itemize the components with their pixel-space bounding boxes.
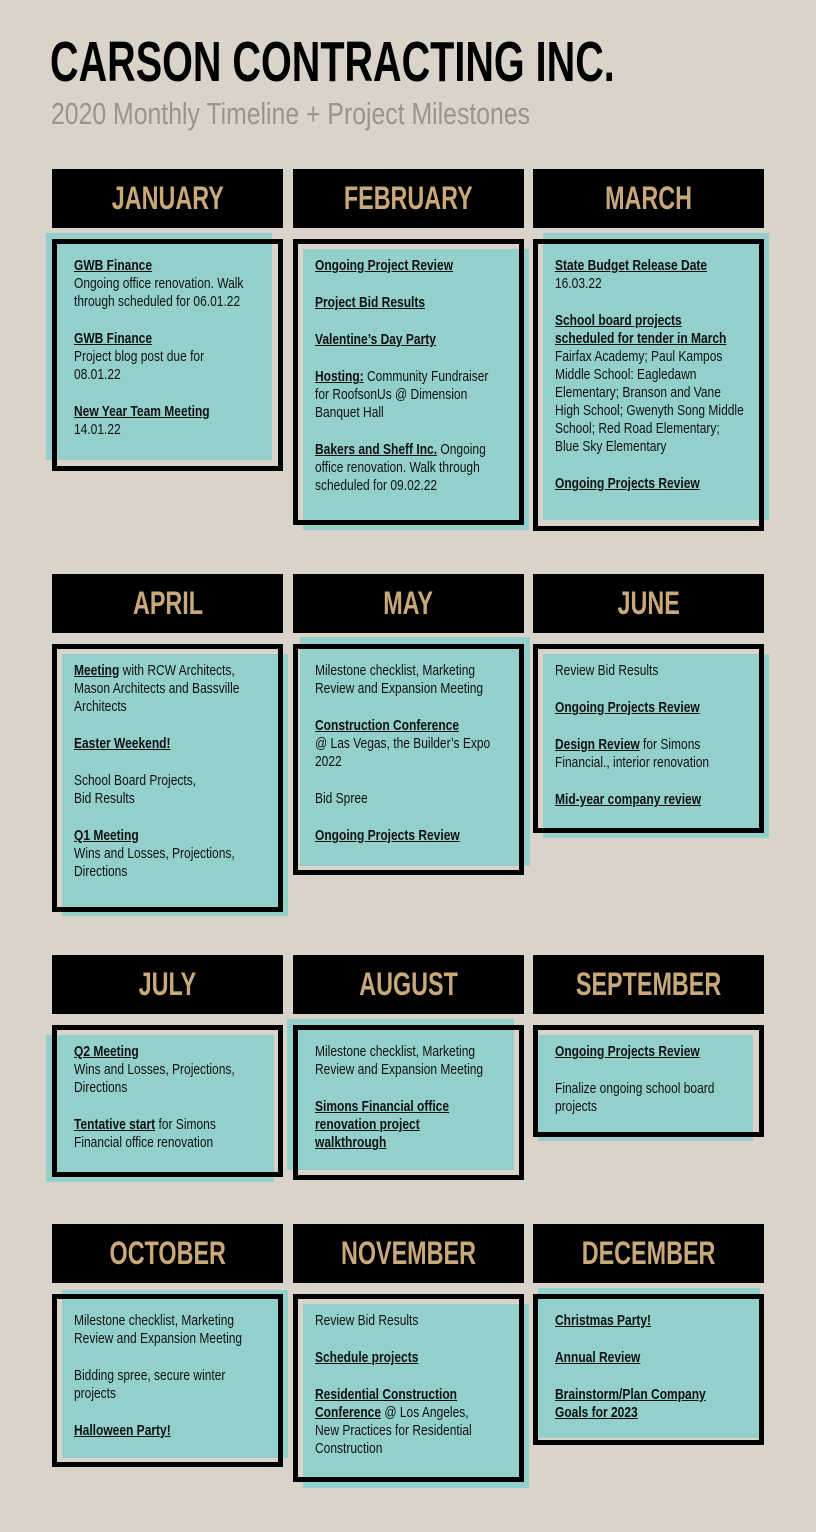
text: may: Review and Expansion Meeting: [315, 680, 483, 697]
heading: march: MARCH: [605, 180, 692, 216]
heading: december: DECEMBER: [582, 1235, 715, 1271]
text: february: scheduled for 09.02.22: [315, 477, 437, 494]
text: april: Bid Results: [74, 790, 135, 807]
text: may: Construction Conference: [315, 717, 459, 734]
text: october: Milestone checklist, Marketing: [74, 1312, 234, 1329]
panel: december: [533, 1224, 764, 1445]
text: february: Ongoing Project Review: [315, 257, 453, 274]
heading: january: [52, 169, 283, 228]
heading: may: [293, 574, 524, 633]
text: february: Bakers and Sheff Inc. Ongoing: [315, 441, 486, 458]
text: september: Ongoing Projects Review: [555, 1043, 700, 1060]
text: january: through scheduled for 06.01.22: [74, 293, 240, 310]
text: june: Financial., interior renovation: [555, 754, 709, 771]
text: july: Q2 Meeting: [74, 1043, 139, 1060]
text: december: Goals for 2023: [555, 1404, 638, 1421]
text: december: Annual Review: [555, 1349, 640, 1366]
text: september: [555, 1043, 714, 1115]
heading: august: [293, 955, 524, 1014]
text: april: Mason Architects and Bassville: [74, 680, 239, 697]
heading: january: JANUARY: [111, 180, 224, 216]
panel: march: [533, 169, 769, 531]
text: december: Christmas Party!: [555, 1312, 651, 1329]
text: july: Tentative start for Simons: [74, 1116, 216, 1133]
text: may: @ Las Vegas, the Builder’s Expo: [315, 735, 490, 752]
text: october: Halloween Party!: [74, 1422, 171, 1439]
text: april: Wins and Losses, Projections,: [74, 845, 235, 862]
text: march: State Budget Release Date: [555, 257, 707, 274]
text: march: School; Red Road Elementary;: [555, 420, 720, 437]
text: march: Elementary; Branson and Vane: [555, 384, 721, 401]
text: may: 2022: [315, 753, 342, 770]
text: february: office renovation. Walk through: [315, 459, 480, 476]
heading: august: AUGUST: [359, 966, 458, 1002]
text: april: Q1 Meeting: [74, 827, 139, 844]
panel: august: [287, 955, 524, 1180]
text: august: [315, 1043, 483, 1151]
title: CARSON CONTRACTING INC.: [50, 30, 615, 94]
text: february: Valentine’s Day Party: [315, 331, 436, 348]
text: july: [74, 1043, 235, 1151]
panel: february: [293, 169, 529, 530]
text: march: [555, 257, 744, 492]
text: may: Bid Spree: [315, 790, 368, 807]
heading: july: JULY: [139, 966, 196, 1002]
text: january: Ongoing office renovation. Walk: [74, 275, 243, 292]
panel: july: [46, 955, 283, 1182]
text: august: renovation project: [315, 1116, 420, 1133]
text: december: Brainstorm/Plan Company: [555, 1386, 706, 1403]
text: november: [315, 1312, 472, 1457]
heading: february: FEBRUARY: [344, 180, 473, 216]
text: november: New Practices for Residential: [315, 1422, 472, 1439]
panel: may: [293, 574, 530, 875]
text: march: Fairfax Academy; Paul Kampos: [555, 348, 722, 365]
heading: november: NOVEMBER: [341, 1235, 476, 1271]
heading: april: APRIL: [132, 585, 203, 621]
text: august: Milestone checklist, Marketing: [315, 1043, 475, 1060]
text: january: Project blog post due for: [74, 348, 204, 365]
heading: october: [52, 1224, 283, 1283]
heading: may: MAY: [384, 585, 433, 621]
panel: april: [52, 574, 288, 916]
text: july: Financial office renovation: [74, 1134, 213, 1151]
heading: april: [52, 574, 283, 633]
text: june: Design Review for Simons: [555, 736, 700, 753]
text: june: Mid-year company review: [555, 791, 701, 808]
text: june: [555, 662, 709, 808]
heading: october: OCTOBER: [109, 1235, 226, 1271]
text: january: GWB Finance: [74, 257, 152, 274]
text: february: [315, 257, 488, 494]
text: march: scheduled for tender in March: [555, 330, 726, 347]
text: july: Wins and Losses, Projections,: [74, 1061, 235, 1078]
text: march: Middle School: Eagledawn: [555, 366, 696, 383]
text: october: projects: [74, 1385, 116, 1402]
heading: february: [293, 169, 524, 228]
text: july: Directions: [74, 1079, 127, 1096]
text: november: Schedule projects: [315, 1349, 418, 1366]
text: september: Finalize ongoing school board: [555, 1080, 714, 1097]
text: august: Simons Financial office: [315, 1098, 449, 1115]
text: january: [74, 257, 244, 438]
text: march: Blue Sky Elementary: [555, 438, 666, 455]
heading: june: JUNE: [617, 585, 680, 621]
heading: september: [533, 955, 764, 1014]
text: april: Directions: [74, 863, 127, 880]
text: september: projects: [555, 1098, 597, 1115]
heading: march: [533, 169, 764, 228]
text: february: Banquet Hall: [315, 404, 384, 421]
text: november: Residential Construction: [315, 1386, 457, 1403]
text: february: Project Bid Results: [315, 294, 425, 311]
text: january: 14.01.22: [74, 421, 121, 438]
text: may: Milestone checklist, Marketing: [315, 662, 475, 679]
text: april: School Board Projects,: [74, 772, 196, 789]
panel: june: [533, 574, 769, 838]
text: august: walkthrough: [315, 1134, 386, 1151]
text: december: [555, 1312, 706, 1421]
subtitle: 2020 Monthly Timeline + Project Milestones: [51, 96, 530, 131]
panel: january: [46, 169, 283, 471]
heading: december: [533, 1224, 764, 1283]
text: may: [315, 662, 490, 844]
heading: july: [52, 955, 283, 1014]
text: february: for RoofsonUs @ Dimension: [315, 386, 467, 403]
text: march: Ongoing Projects Review: [555, 475, 700, 492]
text: april: Architects: [74, 698, 127, 715]
text: april: Easter Weekend!: [74, 735, 170, 752]
heading: september: SEPTEMBER: [576, 966, 721, 1002]
text: october: Review and Expansion Meeting: [74, 1330, 242, 1347]
text: october: [74, 1312, 242, 1439]
text: november: Conference @ Los Angeles,: [315, 1404, 469, 1421]
text: january: New Year Team Meeting: [74, 403, 210, 420]
text: march: High School; Gwenyth Song Middle: [555, 402, 744, 419]
text: june: Ongoing Projects Review: [555, 699, 700, 716]
text: april: Meeting with RCW Architects,: [74, 662, 235, 679]
panel: october: [52, 1224, 288, 1467]
text: january: GWB Finance: [74, 330, 152, 347]
text: march: School board projects: [555, 312, 682, 329]
text: october: Bidding spree, secure winter: [74, 1367, 225, 1384]
heading: november: [293, 1224, 524, 1283]
text: january: 08.01.22: [74, 366, 121, 383]
text: march: 16.03.22: [555, 275, 602, 292]
panel: september: [533, 955, 764, 1141]
text: august: Review and Expansion Meeting: [315, 1061, 483, 1078]
text: november: Construction: [315, 1440, 382, 1457]
text: june: Review Bid Results: [555, 662, 658, 679]
text: february: Hosting: Community Fundraiser: [315, 368, 488, 385]
text: april: [74, 662, 239, 880]
text: may: Ongoing Projects Review: [315, 827, 460, 844]
text: november: Review Bid Results: [315, 1312, 418, 1329]
heading: june: [533, 574, 764, 633]
panel: november: [293, 1224, 529, 1488]
